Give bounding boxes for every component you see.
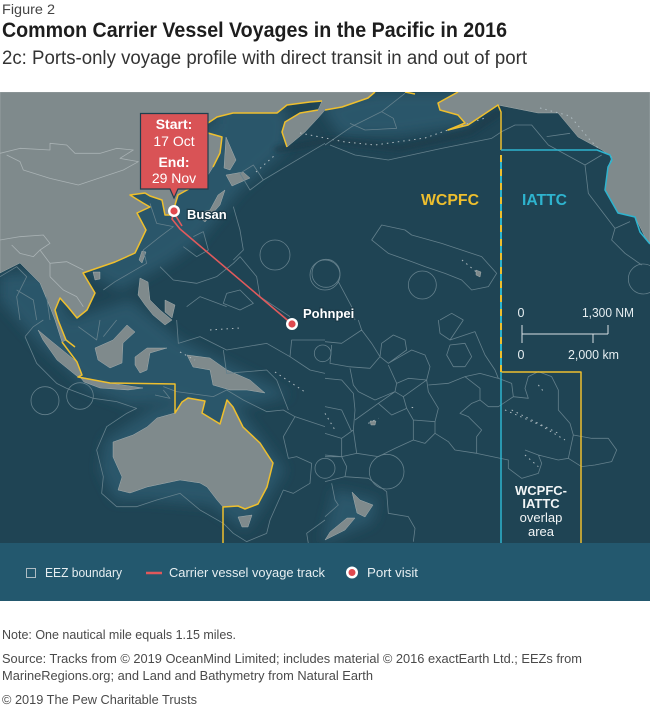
note: Note: One nautical mile equals 1.15 miles. bbox=[2, 628, 236, 642]
dashed overlap boundary bbox=[500, 155, 502, 372]
overlap area label: WCPFC- bbox=[515, 483, 567, 498]
legend: voyage track: Carrier vessel voyage track bbox=[169, 565, 325, 580]
voyage track bbox=[172, 213, 292, 324]
land: New Guinea bbox=[187, 355, 265, 393]
source: MarineRegions.org; and Land and Bathymetry from Natural Earth bbox=[2, 669, 373, 683]
land: Alaska and North America bbox=[438, 92, 650, 243]
subtitle: 2c: Ports-only voyage profile with direct transit in and out of port bbox=[2, 48, 528, 69]
copyright: © 2019 The Pew Charitable Trusts bbox=[2, 693, 197, 707]
scale bar: 0 bbox=[518, 348, 525, 362]
scale bar bbox=[518, 306, 634, 362]
legend band bbox=[0, 543, 650, 601]
port label: Busan: Busan bbox=[187, 207, 227, 222]
scale bar: 1,300 NM bbox=[582, 306, 634, 320]
legend: port visit: Port visit bbox=[367, 565, 418, 580]
shallow shelf water bbox=[0, 92, 480, 543]
figure label: Figure 2 bbox=[2, 1, 55, 17]
land: Hainan Taiwan Philippines bbox=[93, 251, 175, 325]
callout: voyage dates: Start: bbox=[156, 116, 192, 132]
deep trench shading bbox=[274, 126, 476, 153]
legend: port visit bbox=[346, 565, 418, 580]
callout: voyage dates: End: bbox=[158, 154, 190, 170]
overlap area label: IATTC bbox=[522, 496, 560, 511]
source bbox=[2, 652, 582, 683]
land: Sumatra Java Borneo Sulawesi bbox=[38, 325, 167, 390]
land: Tasmania bbox=[238, 515, 252, 527]
WCPFC yellow boundary along the coast bbox=[55, 92, 581, 543]
overlap area label: area bbox=[528, 524, 555, 539]
WCPFC label: WCPFC bbox=[421, 192, 479, 209]
port marker: Busan bbox=[168, 205, 180, 217]
legend: EEZ boundary: EEZ boundary bbox=[45, 565, 122, 580]
land: New Zealand bbox=[325, 492, 373, 540]
port marker: Pohnpei bbox=[286, 318, 298, 330]
small islands bbox=[180, 108, 600, 440]
callout: voyage dates: 29 Nov bbox=[152, 170, 196, 186]
land: Asia and Russia bbox=[0, 92, 375, 342]
IATTC teal boundary bbox=[501, 150, 650, 543]
title: Common Carrier Vessel Voyages in the Pacific in 2016 bbox=[2, 18, 507, 42]
scale bar: 0 bbox=[518, 306, 525, 320]
land masses bbox=[0, 92, 650, 540]
map panel bbox=[0, 92, 650, 543]
EEZ boundaries and country borders bbox=[0, 93, 650, 543]
port label: Pohnpei: Pohnpei bbox=[303, 306, 354, 321]
overlap area label: overlap bbox=[520, 510, 562, 525]
callout: voyage dates: 17 Oct bbox=[153, 133, 195, 149]
land: Australia bbox=[113, 398, 273, 509]
scale bar: 2,000 km bbox=[568, 348, 619, 362]
source: Source: Tracks from © 2019 OceanMind Limited; includes material © 2016 exactEarth Ltd.; EEZs from bbox=[2, 652, 582, 666]
callout: voyage dates bbox=[140, 114, 208, 198]
overlap area label bbox=[515, 486, 566, 536]
IATTC label: IATTC bbox=[522, 192, 567, 209]
land: Japan bbox=[195, 137, 250, 222]
